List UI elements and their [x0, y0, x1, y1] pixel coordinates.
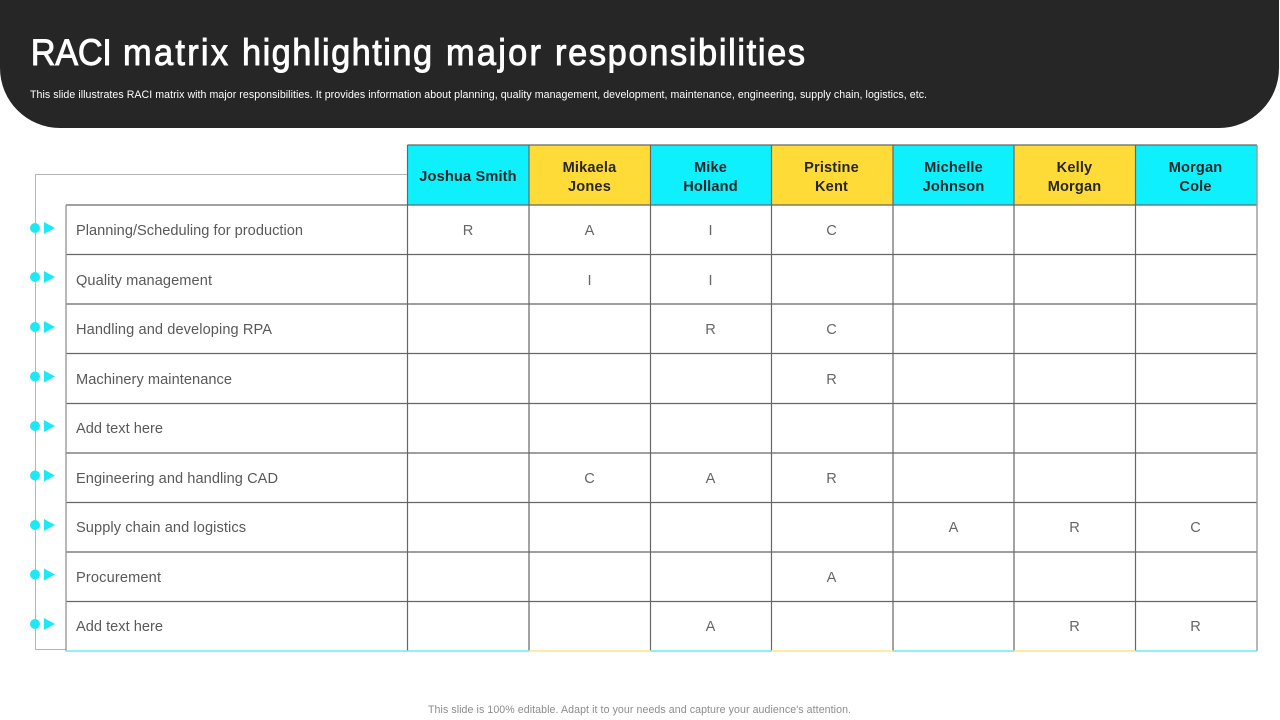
header: Morgan Cole: Morgan	[1169, 160, 1222, 176]
row labels	[76, 223, 303, 635]
row labels: Supply chain and logistics	[76, 520, 246, 536]
RACI values: C	[826, 322, 837, 338]
title: RACI	[31, 32, 111, 73]
RACI values: A	[706, 471, 716, 487]
RACI values	[463, 223, 1201, 635]
header: Mikaela Jones: Jones	[568, 179, 611, 195]
RACI values: R	[1190, 619, 1201, 635]
header band	[0, 0, 1279, 128]
RACI values: R	[705, 322, 716, 338]
RACI values: C	[1190, 520, 1201, 536]
RACI values: R	[1069, 520, 1080, 536]
title: responsibilities	[555, 32, 807, 73]
RACI values: A	[706, 619, 716, 635]
RACI values: A	[827, 570, 837, 586]
title: major	[446, 32, 543, 73]
header: Kelly Morgan: Morgan	[1048, 179, 1101, 195]
header: Mikaela Jones: Mikaela	[563, 160, 617, 176]
RACI values: R	[826, 471, 837, 487]
RACI values: R	[463, 223, 473, 239]
header: Pristine Kent: Kent	[815, 179, 848, 195]
header: Mike Holland	[650, 145, 772, 205]
header: Michelle Johnson: Michelle	[924, 160, 983, 176]
header: Joshua Smith	[408, 145, 529, 205]
header: Pristine Kent: Pristine	[804, 160, 859, 176]
title: matrix	[123, 32, 230, 73]
RACI values: A	[949, 520, 959, 536]
header: Kelly Morgan: Kelly	[1057, 160, 1093, 176]
connector bracket	[36, 174, 407, 650]
row labels: Planning/Scheduling for production	[76, 223, 303, 239]
row labels: Add text here	[76, 421, 163, 437]
row labels: Engineering and handling CAD	[76, 471, 278, 487]
row labels: Handling and developing RPA	[76, 322, 272, 338]
header: Mikaela Jones	[529, 145, 650, 205]
RACI values: R	[826, 372, 837, 388]
RACI values: I	[708, 223, 713, 239]
table grid	[66, 145, 1257, 651]
header: Morgan Cole: Cole	[1179, 179, 1212, 195]
subtitle: This slide illustrates RACI matrix with major responsibilities. It provides information about planning, quality management, development, maintenance, engineering, supply chain, logistics, etc.	[30, 89, 927, 101]
header: Mike Holland: Mike	[694, 160, 727, 176]
row labels: Procurement	[76, 570, 161, 586]
row labels: Quality management	[76, 273, 212, 289]
RACI values: I	[708, 273, 713, 289]
RACI values: C	[584, 471, 595, 487]
footer note: This slide is 100% editable. Adapt it to your needs and capture your audience's attention.	[428, 704, 851, 716]
title: highlighting	[242, 32, 434, 73]
RACI values: R	[1069, 619, 1080, 635]
RACI values: I	[587, 273, 592, 289]
header: Michelle Johnson: Johnson	[923, 179, 984, 195]
header: Kelly Morgan	[1014, 145, 1136, 205]
header: Mike Holland: Holland	[683, 179, 738, 195]
RACI values: A	[585, 223, 595, 239]
row markers	[30, 222, 55, 630]
row labels: Machinery maintenance	[76, 372, 232, 388]
RACI values: C	[826, 223, 837, 239]
header: Pristine Kent	[772, 145, 893, 205]
column headers	[408, 145, 1257, 205]
row labels: Add text here	[76, 619, 163, 635]
header: Joshua Smith: Joshua Smith	[419, 169, 517, 185]
header: Morgan Cole	[1136, 145, 1257, 205]
header: Michelle Johnson	[893, 145, 1014, 205]
